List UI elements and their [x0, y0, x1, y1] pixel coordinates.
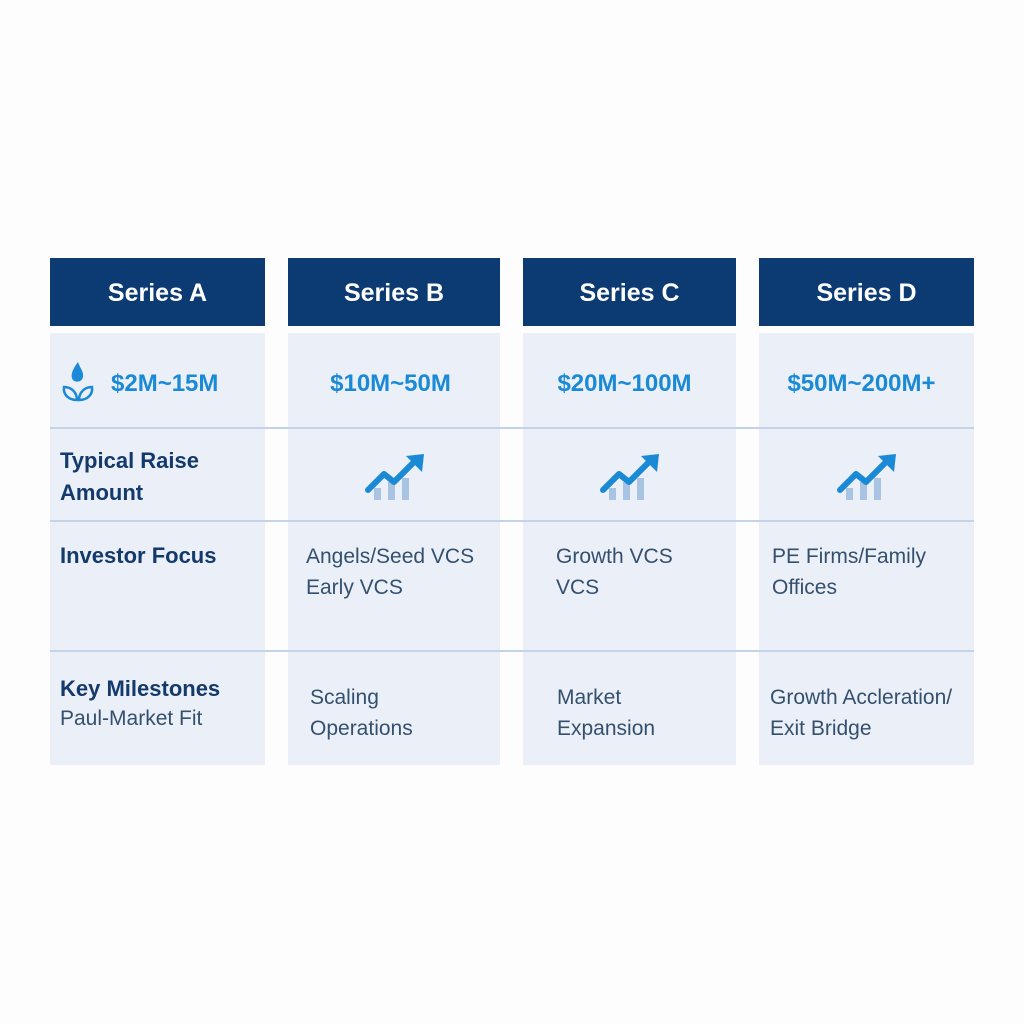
text: milestone D: Growth Accleration/ [770, 686, 952, 709]
label: key milestones: Key Milestones [60, 676, 220, 701]
text: investor C [556, 545, 673, 599]
text: milestone C [557, 686, 655, 740]
text: milestone C: Market [557, 686, 621, 709]
text: milestone B: Operations [310, 717, 413, 740]
header: Series B [288, 258, 500, 326]
amount B: $10M~50M [330, 370, 451, 397]
column backgrounds [50, 333, 265, 765]
label: key milestones: Paul-Market Fit [60, 707, 202, 730]
text: milestone B: Scaling [310, 686, 379, 709]
label: key milestones [60, 676, 220, 730]
icon: sprout [62, 362, 94, 402]
header: Series B: Series B [344, 278, 444, 306]
amount A: $2M~15M [111, 370, 218, 397]
header: Series D [759, 258, 974, 326]
label: typical raise [60, 448, 199, 505]
text: milestone B [310, 686, 413, 740]
text: investor C: Growth VCS [556, 545, 673, 568]
text: investor C: VCS [556, 576, 599, 599]
text: investor B [306, 545, 474, 599]
text: milestone C: Expansion [557, 717, 655, 740]
header: Series C: Series C [579, 278, 680, 306]
text: investor D: PE Firms/Family [772, 545, 926, 568]
header: Series D: Series D [816, 278, 917, 306]
label: investor focus: Investor Focus [60, 543, 216, 568]
text: investor D: Offices [772, 576, 837, 599]
icon: growth chart B [365, 454, 424, 500]
label: typical raise: Typical Raise [60, 448, 199, 473]
icon: growth chart D [837, 454, 896, 500]
header: Series C [523, 258, 736, 326]
text: investor B: Angels/Seed VCS [306, 545, 474, 568]
amount C: $20M~100M [557, 370, 692, 397]
header: Series A [50, 258, 265, 326]
label: typical raise: Amount [60, 480, 143, 505]
text: investor D [772, 545, 926, 599]
header: Series A: Series A [108, 278, 207, 306]
text: milestone D [770, 686, 952, 740]
icon: growth chart C [600, 454, 659, 500]
text: investor B: Early VCS [306, 576, 403, 599]
text: milestone D: Exit Bridge [770, 717, 872, 740]
amount D: $50M~200M+ [787, 370, 936, 397]
